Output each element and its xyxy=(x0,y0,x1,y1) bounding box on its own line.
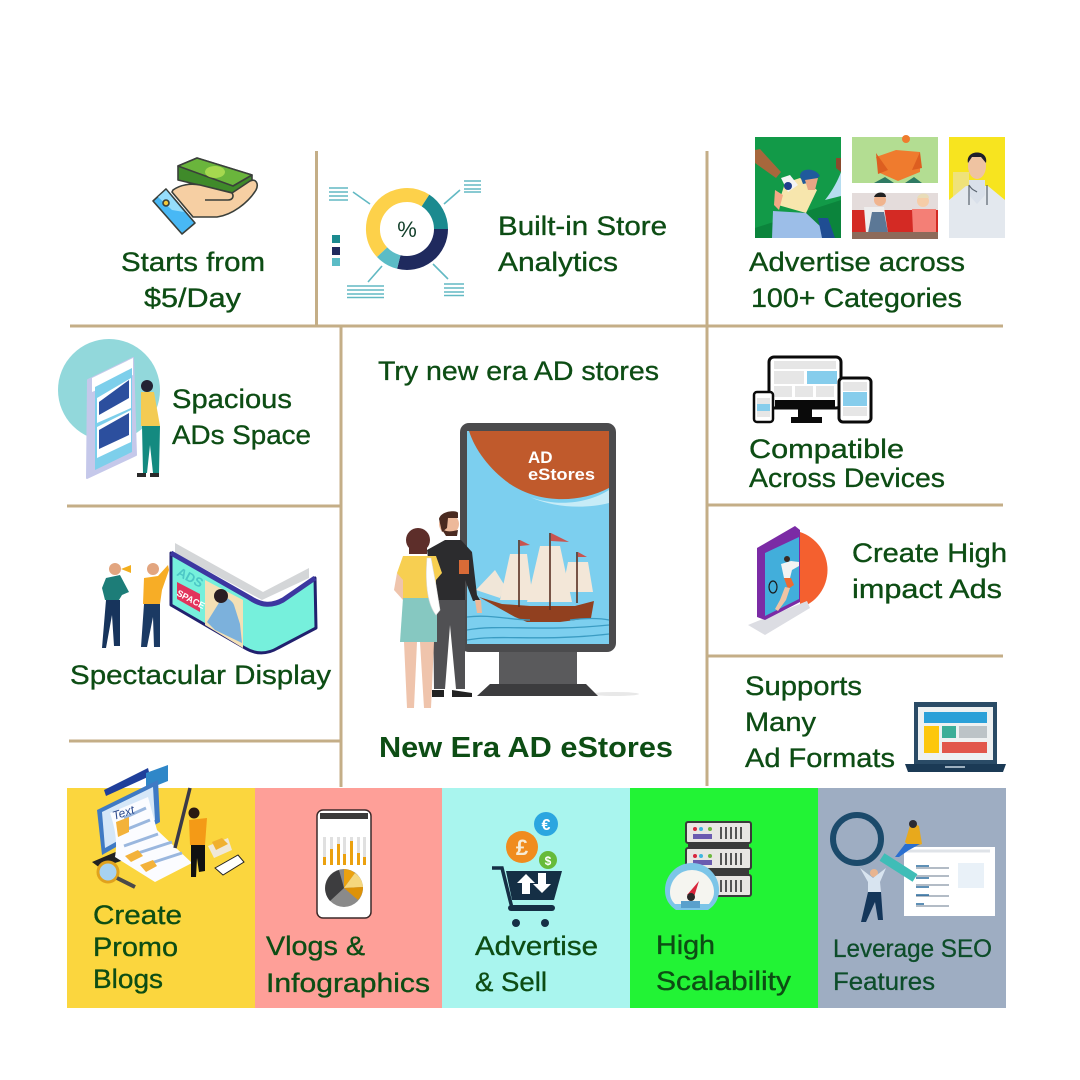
panel: starts from $5/day xyxy=(121,158,265,313)
label: supports: Supports xyxy=(745,671,862,701)
icon: phone with charts xyxy=(317,810,371,918)
label: 100+ categories: 100+ Categories xyxy=(751,283,962,313)
person with megaphone xyxy=(102,563,131,648)
illustration: blog page and writer xyxy=(92,765,244,887)
label: create high: Create High xyxy=(852,538,1007,568)
panel: create high impact ads xyxy=(748,526,1007,635)
label: advertise across: Advertise across xyxy=(749,247,965,277)
label: advertise: Advertise xyxy=(475,931,598,961)
label: spacious: Spacious xyxy=(172,384,292,414)
label: leverage seo: Leverage SEO xyxy=(833,935,992,963)
person pointing xyxy=(141,563,169,647)
icon: curved billboard with two people xyxy=(102,543,316,653)
panel: create promo blogs xyxy=(67,765,255,1008)
icon: billboard with tennis player xyxy=(748,526,828,635)
icon: laptop xyxy=(905,702,1006,772)
panel: built-in store analytics xyxy=(329,181,667,298)
background: yellow xyxy=(67,788,255,1008)
background: pink xyxy=(255,788,442,1008)
label: create: Create xyxy=(93,900,182,930)
panel: vlogs and infographics xyxy=(255,788,442,1008)
image: doctor xyxy=(949,137,1005,238)
icon: cart with coins: € xyxy=(542,817,551,834)
label: analytics: Analytics xyxy=(498,247,618,277)
label: ads space: ADs Space xyxy=(172,420,311,450)
kiosk text: eStores xyxy=(528,465,595,484)
label: blogs: Blogs xyxy=(93,964,163,994)
heading: try new era ad stores: Try new era AD stores xyxy=(378,356,659,386)
icon: teal circle with phone and woman xyxy=(58,339,160,478)
illustration: kiosk xyxy=(394,423,639,708)
panel: supports many ad formats xyxy=(745,671,1006,773)
label: ad formats: Ad Formats xyxy=(745,743,895,773)
illustration: magnifier and search results xyxy=(833,815,995,922)
label: spectacular display: Spectacular Display xyxy=(70,660,332,690)
icon: responsive devices xyxy=(754,357,871,423)
donut chart xyxy=(373,195,441,263)
ship xyxy=(467,533,609,640)
panel: compatible across devices xyxy=(749,357,945,493)
panel: advertise and sell xyxy=(442,788,630,1008)
label: promo: Promo xyxy=(93,932,178,962)
icon: cart with coins: $ xyxy=(545,854,552,868)
icon: curved billboard with two people: SPACE xyxy=(175,588,207,611)
image: cricket xyxy=(755,137,841,238)
percent sign: % xyxy=(397,217,417,242)
label: built-in store: Built-in Store xyxy=(498,211,667,241)
chart legend xyxy=(332,235,340,266)
kiosk text xyxy=(528,448,595,484)
heading: new era ad estores: New Era AD eStores xyxy=(379,732,673,764)
panel: leverage seo features xyxy=(818,788,1006,1008)
icon: cart with coins: £ xyxy=(516,835,529,860)
label: $5/Day: $5/Day xyxy=(144,283,242,313)
label: scalability: Scalability xyxy=(656,966,792,996)
background: slate xyxy=(818,788,1006,1008)
label: across devices: Across Devices xyxy=(749,463,945,493)
panel: high scalability xyxy=(630,788,818,1008)
background: green xyxy=(630,788,818,1008)
icon: cart with coins xyxy=(492,812,562,927)
man xyxy=(427,511,482,697)
panel: spacious ads space xyxy=(58,339,311,478)
label: compatible: Compatible xyxy=(749,434,904,464)
icon: hand holding money xyxy=(153,158,257,234)
label: features: Features xyxy=(833,968,935,996)
label: infographics: Infographics xyxy=(266,968,430,998)
panel: center ad estores xyxy=(378,356,673,764)
label: vlogs: Vlogs & xyxy=(266,931,365,961)
icon: curved billboard with two people: ADS xyxy=(175,564,206,591)
icon: servers and gauge xyxy=(665,822,751,910)
label: starts from: Starts from xyxy=(121,247,265,277)
image: chefs xyxy=(852,192,938,239)
label: high: High xyxy=(656,930,715,960)
kiosk text: AD xyxy=(528,448,553,467)
label: & sell: & Sell xyxy=(475,967,547,997)
panel: advertise across categories xyxy=(749,135,1005,313)
background: aqua xyxy=(442,788,630,1008)
image: cooking hands xyxy=(852,135,938,183)
woman xyxy=(394,528,442,708)
label: impact ads: impact Ads xyxy=(852,574,1002,604)
panel: spectacular display xyxy=(70,543,332,690)
illustration: blog page and writer: Text xyxy=(111,802,137,823)
chart callouts xyxy=(329,181,481,298)
label: many: Many xyxy=(745,707,817,737)
